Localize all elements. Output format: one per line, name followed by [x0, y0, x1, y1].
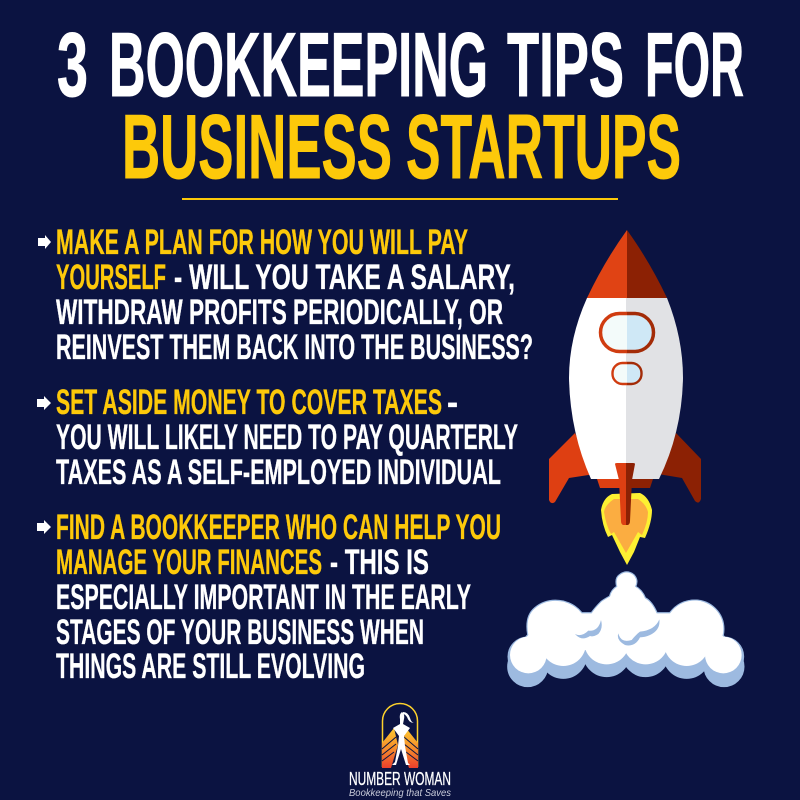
tip 3: bookkeeper: THINGS ARE STILL EVOLVING [56, 647, 365, 686]
tip 1: pay yourself: YOURSELF [56, 258, 166, 297]
logo tagline: Bookkeeping that Saves [349, 787, 452, 799]
tip 1: pay yourself: WITHDRAW PROFITS PERIODICALLY, OR [56, 293, 503, 332]
tip 2: taxes: TAXES AS A SELF-EMPLOYED INDIVIDUAL [56, 453, 501, 492]
tip 3: bookkeeper: STAGES OF YOUR BUSINESS WHEN [56, 613, 424, 652]
tip 1: pay yourself: - WILL YOU TAKE A SALARY, [174, 258, 515, 297]
logo: Number Woman [349, 704, 452, 799]
fins [549, 433, 595, 503]
title [57, 15, 744, 198]
tip 3: bookkeeper: ESPECIALLY IMPORTANT IN THE EARLY [56, 578, 471, 617]
cloud inner shadows [575, 620, 602, 638]
centre fin [615, 463, 626, 525]
cloud shadow [508, 572, 743, 686]
small window [612, 363, 642, 384]
large window [600, 314, 654, 352]
engine band [597, 479, 626, 488]
title: TIPS [507, 15, 624, 116]
tip 3: bookkeeper: MANAGE YOUR FINANCES [56, 543, 322, 582]
flame [601, 493, 652, 565]
tip 2: taxes [37, 383, 518, 492]
tip 2: taxes: SET ASIDE MONEY TO COVER TAXES [56, 383, 442, 422]
logo wings [382, 728, 418, 768]
logo figure [392, 712, 414, 765]
logo name: NUMBER WOMAN [349, 769, 451, 789]
title: BUSINESS [122, 97, 392, 198]
nose cone [587, 230, 627, 298]
title: BOOKKEEPING [109, 15, 488, 116]
tip 1: pay yourself: MAKE A PLAN FOR HOW YOU WILL PAY [56, 223, 468, 262]
icon: smoke cloud [508, 572, 743, 686]
logo arch [382, 704, 418, 767]
tip 3: bookkeeper: FIND A BOOKKEEPER WHO CAN HELP YOU [56, 508, 501, 547]
tip 3: bookkeeper [37, 508, 501, 686]
tip 1: pay yourself [38, 223, 533, 367]
tip 2: taxes: YOU WILL LIKELY NEED TO PAY QUARTERLY [56, 418, 518, 457]
body [569, 298, 626, 479]
cloud body [510, 572, 742, 673]
tip 2: taxes: - [447, 383, 458, 422]
icon: rocket [549, 230, 701, 565]
title: 3 [57, 15, 88, 116]
tip 3: bookkeeper: - THIS IS [330, 543, 429, 582]
